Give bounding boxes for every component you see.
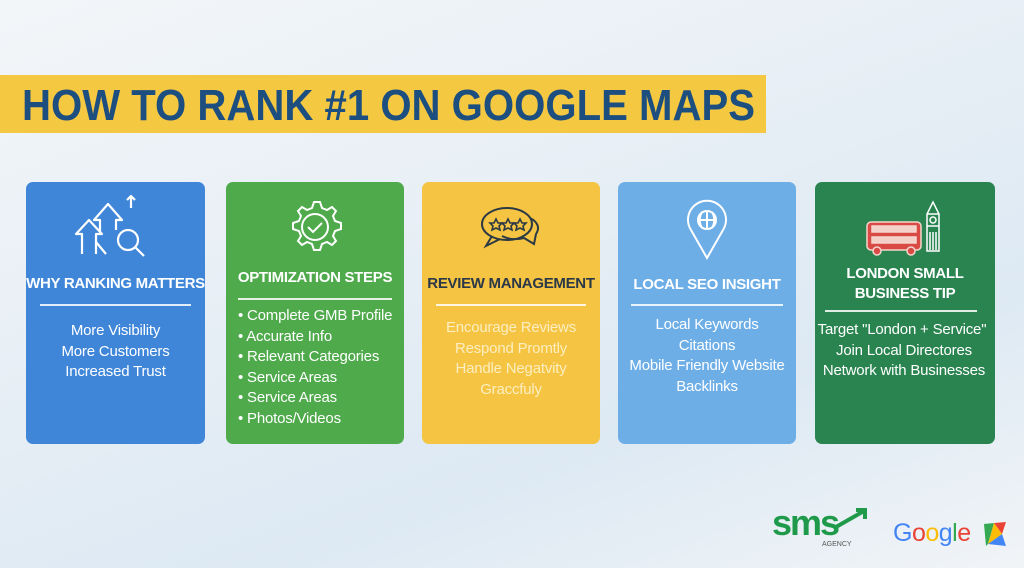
text block: More Visibility <box>71 322 160 339</box>
text block: • Service Areas <box>238 389 337 406</box>
heading: WHY RANKING MATTERS <box>26 275 205 292</box>
heading: LOCAL SEO INSIGHT <box>633 276 781 293</box>
heading: BUSINESS TIP <box>855 285 955 302</box>
text block: Encourage Reviews <box>446 319 576 336</box>
panel: review management <box>422 182 600 444</box>
text block <box>629 316 785 394</box>
text block: Handle Negatvity <box>455 360 567 377</box>
text block <box>61 322 170 380</box>
heading: LONDON SMALL <box>846 265 964 282</box>
text block: Target "London + Service" <box>818 321 986 338</box>
icon: arrows with magnifier <box>74 194 145 257</box>
text block: Backlinks <box>676 378 738 394</box>
icon: gear check <box>292 201 342 251</box>
text block: • Service Areas <box>238 368 337 386</box>
text block: Graccfuly <box>480 380 542 398</box>
logo: sms agency: AGENCY <box>822 541 852 548</box>
panel: local seo insight <box>618 182 796 444</box>
logo: google: Google <box>893 519 971 547</box>
text block: Local Keywords <box>655 316 759 333</box>
icon: globe pin <box>687 200 727 260</box>
panel: why ranking matters <box>26 182 205 444</box>
icon: bus and big ben <box>866 200 940 256</box>
text block: Citations <box>679 336 735 354</box>
text block <box>238 307 392 426</box>
text block: Join Local Directores <box>836 342 972 358</box>
text block: Respond Promtly <box>455 340 567 356</box>
text block: Network with Businesses <box>823 362 985 379</box>
icon: google maps <box>984 522 1006 546</box>
text block: • Accurate Info <box>238 328 332 344</box>
text block: • Relevant Categories <box>238 348 379 365</box>
heading <box>846 265 964 302</box>
text block <box>446 319 576 398</box>
panel: optimization steps <box>226 182 404 444</box>
text block: More Customers <box>61 342 170 360</box>
logo: sms agency: sms <box>772 502 838 543</box>
icon: speech bubbles stars <box>481 207 539 248</box>
panel: london small business tip <box>815 182 995 444</box>
text block: Mobile Friendly Website <box>629 357 785 374</box>
heading: REVIEW MANAGEMENT <box>427 275 595 292</box>
text block: • Complete GMB Profile <box>238 307 392 324</box>
text block: • Photos/Videos <box>238 410 341 426</box>
logo: sms agency <box>772 502 867 548</box>
text block <box>818 321 986 379</box>
heading: OPTIMIZATION STEPS <box>238 269 392 286</box>
text block: Increased Trust <box>65 363 166 380</box>
